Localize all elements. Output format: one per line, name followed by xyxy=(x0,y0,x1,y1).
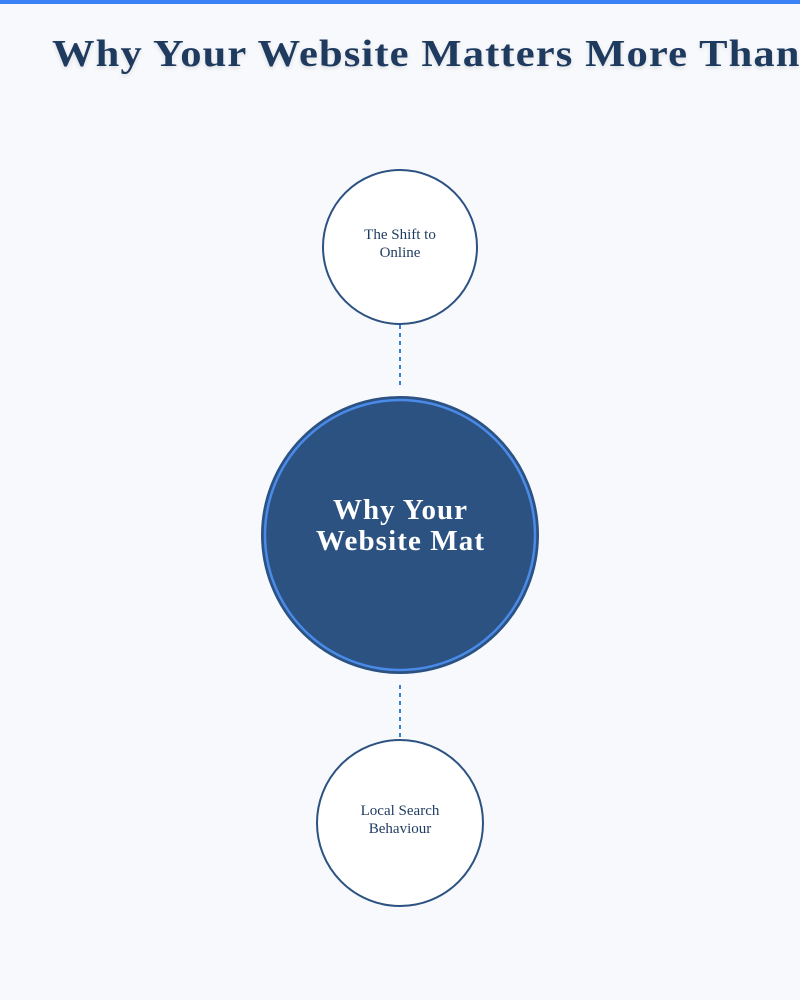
node: Local Search Behaviour xyxy=(317,740,483,906)
connector: bottom xyxy=(399,685,401,740)
central hub xyxy=(262,397,538,673)
node: The Shift to Online: Online xyxy=(380,245,421,261)
node: Local Search Behaviour: Local Search xyxy=(361,803,440,819)
central hub: Why Your xyxy=(333,494,467,526)
top accent bar xyxy=(0,0,800,4)
connector: top xyxy=(399,325,401,386)
node: The Shift to Online: The Shift to xyxy=(364,227,436,243)
node: The Shift to Online xyxy=(323,170,477,324)
central hub: Website Mat xyxy=(316,525,484,557)
node: Local Search Behaviour: Behaviour xyxy=(369,821,431,837)
